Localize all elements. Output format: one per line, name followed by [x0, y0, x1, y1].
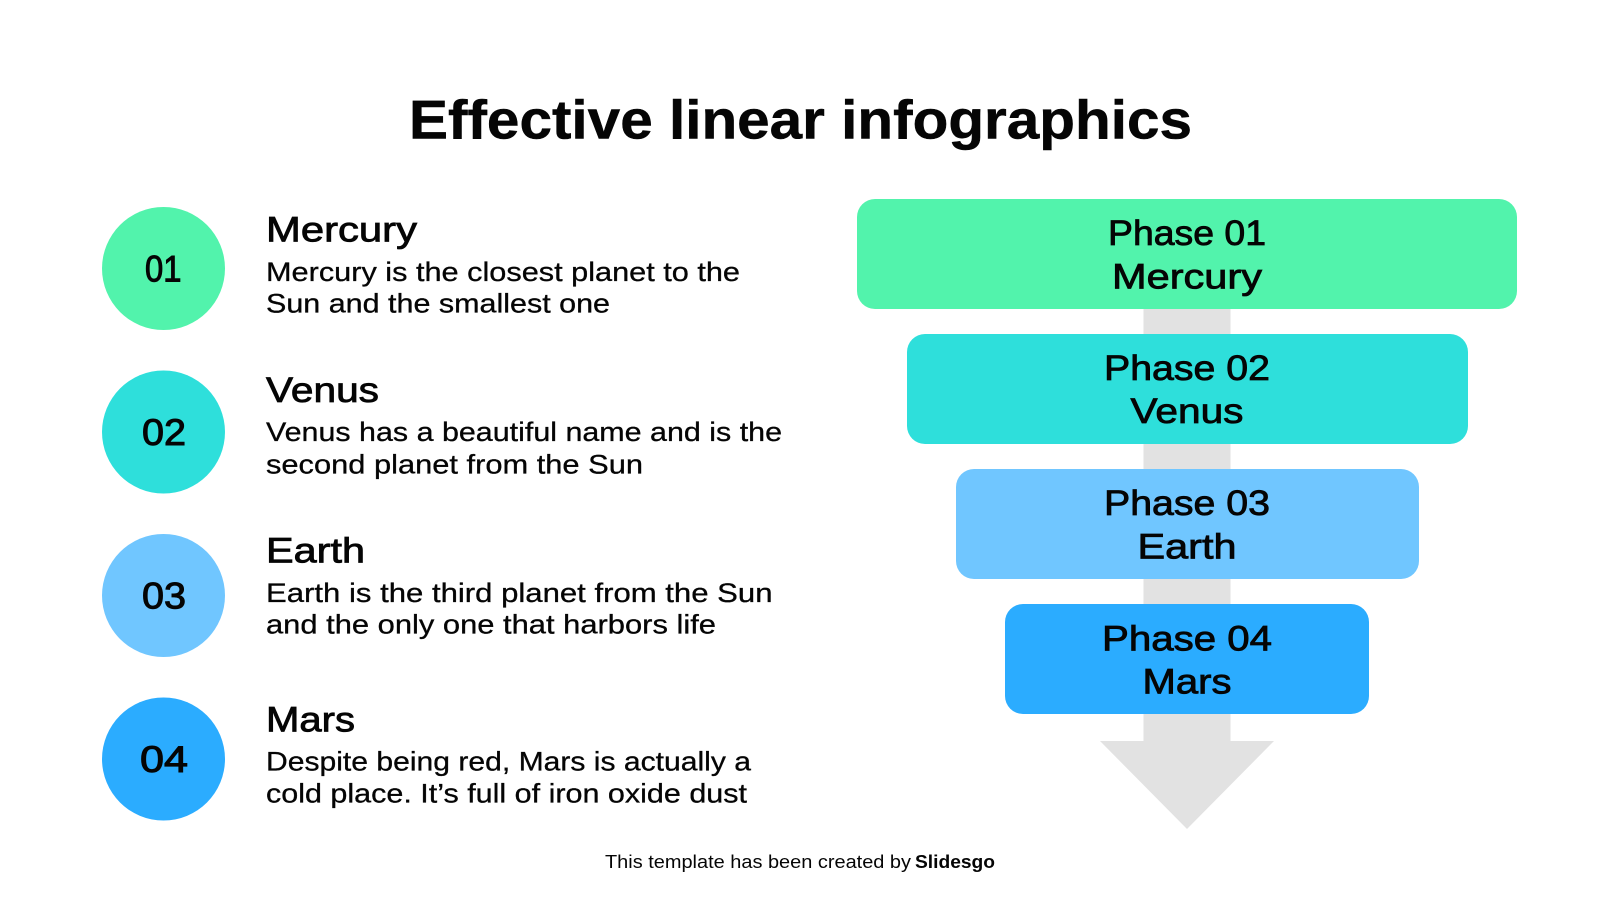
item: Mercury: [102, 207, 740, 330]
title: Effective linear infographics: [409, 88, 1192, 150]
text: Mars description: [266, 746, 752, 808]
phase 03 box: Phase 03: [1104, 484, 1270, 523]
phase 04 box: Mars: [1142, 662, 1232, 702]
text: Mars description: Despite being red, Mars is actually a: [266, 746, 752, 776]
phase 01 box: Mercury: [1112, 258, 1263, 296]
phase 04 box: [1005, 604, 1369, 714]
text: Venus description: second planet from the Sun: [266, 450, 643, 480]
text: Mars description: cold place. It’s full of iron oxide dust: [266, 778, 748, 808]
number badge 04: [102, 698, 225, 820]
heading: Mercury: Mercury: [266, 210, 418, 250]
number badge 02: [102, 370, 225, 494]
heading: Venus: Venus: [266, 371, 379, 410]
phase 02 box: Phase 02: [1104, 349, 1270, 388]
text: Mercury description: [266, 257, 740, 318]
footer credit: This template has been created by: [605, 852, 911, 872]
phase 03 box: [956, 469, 1419, 579]
phase 02 box: Venus: [1130, 392, 1244, 431]
number badge 01: 01: [145, 248, 182, 290]
phase 01 box: [857, 199, 1517, 309]
heading: Earth: Earth: [266, 532, 365, 570]
number badge 03: 03: [142, 576, 186, 616]
text: Earth description: and the only one that harbors life: [266, 610, 716, 640]
phase 04 box: Phase 04: [1102, 620, 1272, 658]
item: Venus: [102, 370, 782, 494]
text: Earth description: Earth is the third planet from the Sun: [266, 578, 772, 608]
text: Earth description: [266, 578, 772, 640]
text: Venus description: Venus has a beautiful name and is the: [266, 417, 782, 447]
number badge 03: [102, 534, 225, 657]
text: Mercury description: Mercury is the closest planet to the: [266, 257, 740, 287]
panel: planet list: [102, 207, 782, 820]
item: Mars: [102, 698, 752, 820]
heading: Mars: Mars: [266, 700, 355, 740]
arrow: downward: [1100, 300, 1274, 829]
phase 02 box: [907, 334, 1468, 444]
panel: phase funnel: [857, 199, 1517, 829]
item: Earth: [102, 532, 772, 657]
text: Venus description: [266, 417, 782, 480]
number badge 04: 04: [140, 739, 188, 780]
number badge 02: 02: [142, 412, 186, 453]
phase 03 box: Earth: [1138, 528, 1236, 566]
phase 01 box: Phase 01: [1108, 214, 1266, 253]
footer credit: Slidesgo: [915, 852, 995, 872]
number badge 01: [102, 207, 225, 330]
text: Mercury description: Sun and the smallest one: [266, 288, 610, 318]
